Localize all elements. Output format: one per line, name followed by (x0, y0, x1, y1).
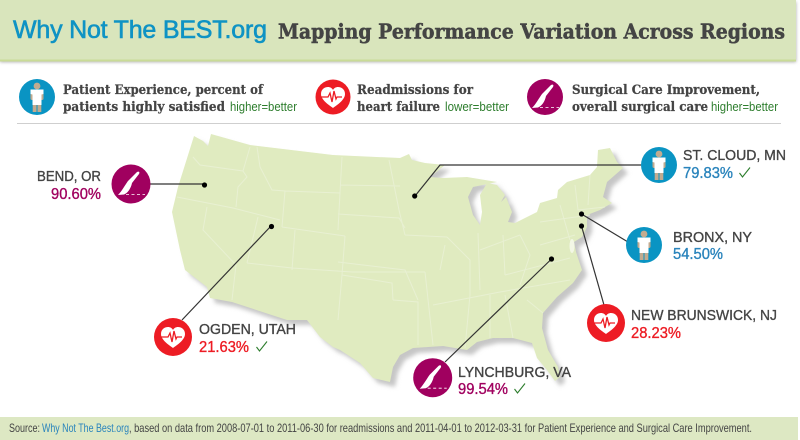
callout: Bend, OR: BEND, OR (37, 168, 101, 185)
callout: St. Cloud, MN: ST. CLOUD, MN (683, 147, 786, 164)
legend: surgical care (527, 79, 778, 115)
callout: Bend, OR: 90.60% (51, 186, 101, 203)
logo title: Why Not The BEST.org (13, 16, 267, 44)
callout: Ogden, Utah: OGDEN, UTAH (199, 321, 296, 338)
callout: Bronx, NY: 54.50% (673, 246, 723, 263)
callout: Lynchburg, VA (413, 256, 571, 398)
footer source note: Source: (9, 421, 40, 435)
legend: readmissions: lower=better (445, 100, 509, 114)
footer source note (0, 417, 798, 440)
callout: Ogden, Utah (154, 224, 296, 356)
callout: Bronx, NY (579, 211, 752, 263)
header band (0, 0, 796, 62)
callout: St. Cloud, MN (412, 147, 786, 199)
callout: Ogden, Utah: 21.63% (199, 339, 249, 356)
legend: surgical care: higher=better (711, 100, 778, 114)
legend: readmissions (316, 80, 509, 115)
callout: Bend, OR (37, 164, 207, 204)
footer source note: Why Not The Best.org (42, 421, 129, 435)
legend: surgical care: overall surgical care (572, 100, 708, 115)
callout: Lynchburg, VA: 99.54% (458, 381, 508, 398)
callout: St. Cloud, MN: 79.83% (683, 165, 733, 182)
callout: New Brunswick, NJ (579, 223, 777, 342)
legend: surgical care: Surgical Care Improvement, (572, 83, 760, 98)
legend: patient experience: patients highly satisfied (63, 100, 225, 115)
legend: patient experience: Patient Experience, percent of (63, 83, 264, 98)
legend: readmissions: heart failure (357, 100, 440, 115)
legend: patient experience: higher=better (230, 100, 297, 114)
callout: New Brunswick, NJ: 28.23% (631, 325, 681, 342)
callout: New Brunswick, NJ: NEW BRUNSWICK, NJ (631, 307, 777, 324)
callout: Bronx, NY: BRONX, NY (673, 229, 752, 246)
callout: Lynchburg, VA: LYNCHBURG, VA (458, 364, 571, 381)
legend: patient experience (19, 79, 297, 115)
map of the United States (172, 134, 628, 387)
legend: readmissions: Readmissions for (357, 83, 473, 98)
